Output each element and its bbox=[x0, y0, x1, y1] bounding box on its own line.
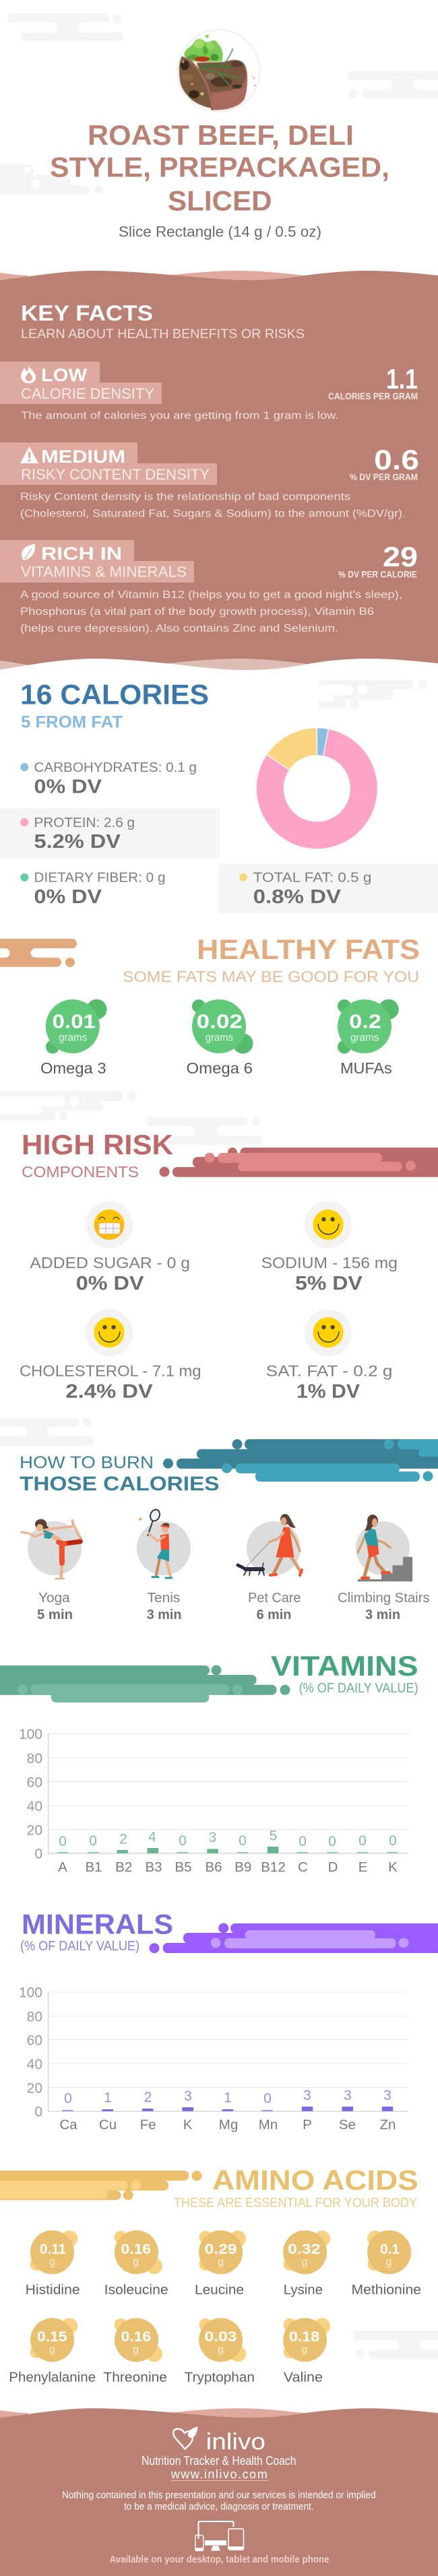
badge: MUFAs bbox=[338, 999, 399, 1077]
decoration: high risk banner bbox=[159, 1148, 438, 1177]
decoration: minerals banner bbox=[150, 1923, 438, 1953]
badge: omega 3: 0.01 bbox=[53, 1012, 96, 1033]
activity: tenis: 3 min bbox=[147, 1608, 182, 1622]
subheading: key facts: LEARN ABOUT HEALTH BENEFITS OR RISKS bbox=[21, 327, 305, 341]
badge: omega 3: Omega 3 bbox=[40, 1059, 106, 1077]
decorative cloud: mid left bbox=[0, 1091, 136, 1121]
logo: inlivo bbox=[173, 2426, 265, 2455]
title: STYLE, PREPACKAGED, bbox=[50, 151, 389, 183]
activity: tenis: Tenis bbox=[147, 1591, 180, 1606]
legend: carbohydrates bbox=[20, 760, 197, 798]
subheading: amino acids: THESE ARE ESSENTIAL FOR YOUR BODY bbox=[174, 2195, 417, 2210]
fact: rich in vitamins and minerals bbox=[0, 540, 418, 634]
subheading: vitamins percent of daily value: (% OF DAILY VALUE) bbox=[299, 1681, 418, 1696]
amino acid: methionine: g bbox=[386, 2256, 392, 2268]
bar chart: vitamins: 60 bbox=[27, 1775, 42, 1790]
amino acid: lysine: Lysine bbox=[284, 2283, 323, 2298]
bar chart: vitamins: B3 bbox=[145, 1859, 162, 1875]
bar chart: minerals: Mg bbox=[219, 2117, 238, 2133]
bar chart: minerals: 3 bbox=[184, 2088, 192, 2104]
activity: tenis bbox=[137, 1508, 191, 1622]
legend: total fat: TOTAL FAT: 0.5 g bbox=[253, 870, 371, 885]
bar chart: vitamins: 0 bbox=[34, 1847, 42, 1861]
bar chart: minerals: Ca bbox=[59, 2117, 77, 2133]
amino acid: histidine: 0.11 bbox=[40, 2242, 66, 2257]
risk item: sodium bbox=[261, 1201, 398, 1294]
badge: omega 3 bbox=[40, 999, 106, 1077]
serving size subtitle: Slice Rectangle (14 g / 0.5 oz) bbox=[119, 224, 321, 240]
fact: rich in vitamins and minerals: 29 bbox=[383, 541, 418, 572]
food photo: roast beef bbox=[178, 30, 260, 112]
legend: dietary fiber: DIETARY FIBER: 0 g bbox=[34, 870, 166, 885]
bar chart: minerals: 0 bbox=[263, 2091, 272, 2107]
legend: protein: PROTEIN: 2.6 g bbox=[34, 816, 135, 830]
fact: medium risky content density bbox=[0, 442, 419, 520]
heading: high risk: HIGH RISK bbox=[22, 1129, 173, 1160]
disclaimer: to be a medical advice, diagnosis or treatment. bbox=[124, 2501, 314, 2513]
bar chart: minerals: P bbox=[303, 2117, 312, 2133]
bar chart: minerals: 3 bbox=[383, 2088, 392, 2103]
amino acid: methionine: 0.1 bbox=[380, 2242, 400, 2257]
amino acid: histidine: g bbox=[49, 2256, 55, 2268]
activity: climbing stairs bbox=[338, 1515, 430, 1622]
bar chart: minerals: Fe bbox=[140, 2117, 156, 2133]
website link: www.inlivo.com bbox=[170, 2468, 268, 2481]
top wave bbox=[0, 271, 438, 657]
icon: flame bbox=[21, 365, 36, 383]
amino acid: methionine bbox=[352, 2231, 421, 2298]
fact: medium risky content density: 0.6 bbox=[374, 444, 419, 475]
fact: medium risky content density: % DV PER GRAM bbox=[350, 471, 418, 482]
decorative cloud: left of title bbox=[0, 165, 102, 194]
decorative cloud: burn bbox=[0, 1418, 94, 1446]
amino acid: threonine bbox=[103, 2318, 167, 2385]
bar chart: minerals: 0 bbox=[34, 2104, 42, 2120]
bar chart: vitamins: 0 bbox=[299, 1834, 307, 1849]
bar chart: vitamins: 0 bbox=[328, 1834, 336, 1849]
activity: pet care: 6 min bbox=[257, 1608, 291, 1622]
bar chart: minerals: 20 bbox=[27, 2081, 42, 2096]
subheading: healthy fats: SOME FATS MAY BE GOOD FOR YOU bbox=[123, 968, 419, 985]
bar chart: minerals: 3 bbox=[344, 2088, 352, 2103]
activity: pet care: Pet Care bbox=[248, 1591, 301, 1606]
heading: amino acids: AMINO ACIDS bbox=[212, 2165, 418, 2196]
bar chart: vitamins: K bbox=[388, 1859, 398, 1875]
amino acid: tryptophan bbox=[185, 2318, 255, 2385]
fact: low calorie density bbox=[0, 362, 418, 422]
amino acid: histidine bbox=[26, 2231, 80, 2298]
badge: omega 6: Omega 6 bbox=[186, 1059, 253, 1077]
legend: protein: 5.2% DV bbox=[34, 831, 121, 853]
activity: pet care bbox=[238, 1514, 302, 1622]
badge: omega 6: 0.02 bbox=[197, 1012, 243, 1033]
amino acid: isoleucine: Isoleucine bbox=[104, 2283, 168, 2298]
amino acid: tryptophan: g bbox=[218, 2344, 224, 2356]
decoration: amino acids banner bbox=[0, 2171, 202, 2200]
legend: protein bbox=[0, 808, 220, 858]
badge: MUFAs: grams bbox=[350, 1032, 379, 1044]
bottom wave bbox=[0, 653, 438, 675]
fact: rich in vitamins and minerals: Phosphorus (a vital part of the body growth process), Vitamin B6 bbox=[20, 606, 374, 618]
panel: footer bbox=[0, 2408, 438, 2576]
amino acid: valine: Valine bbox=[284, 2371, 323, 2385]
fact: rich in vitamins and minerals: % DV PER CALORIE bbox=[338, 568, 417, 579]
amino acid: valine: 0.18 bbox=[289, 2330, 319, 2345]
fact: medium risky content density: MEDIUM bbox=[41, 447, 125, 467]
amino acid: leucine: Leucine bbox=[195, 2283, 244, 2298]
legend: carbohydrates: CARBOHYDRATES: 0.1 g bbox=[34, 760, 197, 775]
bar chart: vitamins: 40 bbox=[27, 1799, 42, 1814]
activity: yoga: 5 min bbox=[37, 1608, 73, 1622]
bar chart: vitamins: 2 bbox=[119, 1832, 127, 1847]
activity: climbing stairs: 3 min bbox=[365, 1608, 400, 1622]
badge: MUFAs: 0.2 bbox=[349, 1012, 381, 1033]
disclaimer: Nothing contained in this presentation and our services is intended or implied bbox=[62, 2489, 376, 2501]
bar chart: minerals: Se bbox=[339, 2117, 356, 2133]
bar chart: vitamins: B6 bbox=[205, 1859, 222, 1875]
bar chart: minerals: 1 bbox=[104, 2090, 112, 2106]
activity: yoga: Yoga bbox=[38, 1591, 71, 1606]
fact: rich in vitamins and minerals: VITAMINS & MINERALS bbox=[21, 563, 187, 581]
decoration: vitamins banner bbox=[0, 1665, 290, 1703]
risk item: added sugar bbox=[30, 1201, 190, 1294]
legend: carbohydrates: 0% DV bbox=[34, 777, 102, 798]
risk item: saturated fat: SAT. FAT - 0.2 g bbox=[266, 1362, 392, 1379]
risk item: cholesterol: CHOLESTEROL - 7.1 mg bbox=[20, 1362, 201, 1379]
amino acid: leucine: g bbox=[218, 2256, 224, 2268]
bar chart: minerals: Zn bbox=[380, 2117, 396, 2133]
bar chart: vitamins: B2 bbox=[115, 1859, 132, 1875]
risk item: sodium: SODIUM - 156 mg bbox=[261, 1254, 398, 1272]
fact: low calorie density: The amount of calories you are getting from 1 gram is low. bbox=[21, 410, 338, 422]
amino acid: leucine bbox=[195, 2231, 246, 2298]
bar chart: vitamins: 0 bbox=[358, 1833, 367, 1849]
heading: how to burn those calories: HOW TO BURN bbox=[20, 1453, 154, 1472]
amino acid: phenylalanine bbox=[9, 2318, 96, 2385]
fact: rich in vitamins and minerals: (helps cure depression). Also contains Zinc and Selenium. bbox=[20, 623, 338, 634]
amino acid: lysine: g bbox=[302, 2256, 307, 2268]
amino acid: leucine: 0.29 bbox=[205, 2242, 237, 2257]
amino acid: tryptophan: 0.03 bbox=[205, 2330, 237, 2345]
bar chart: minerals: 1 bbox=[224, 2090, 232, 2106]
amino acid: histidine: Histidine bbox=[26, 2283, 80, 2298]
bar chart: minerals: 100 bbox=[19, 1985, 42, 2000]
amino acid: isoleucine: 0.16 bbox=[121, 2242, 151, 2257]
bar chart: vitamins: C bbox=[298, 1859, 308, 1875]
fact: rich in vitamins and minerals: RICH IN bbox=[41, 543, 122, 564]
decoration: burn banner bbox=[163, 1439, 438, 1482]
fact: low calorie density: CALORIES PER GRAM bbox=[328, 391, 418, 401]
bar chart: vitamins: B9 bbox=[234, 1859, 251, 1875]
fact: low calorie density: 1.1 bbox=[386, 363, 418, 395]
bar chart: vitamins: 0 bbox=[179, 1833, 187, 1849]
legend: dietary fiber: 0% DV bbox=[34, 886, 102, 908]
risk item: added sugar: 0% DV bbox=[76, 1273, 144, 1294]
bar chart: vitamins: A bbox=[58, 1859, 67, 1875]
bar chart: minerals: 40 bbox=[27, 2057, 42, 2072]
bar chart: vitamins: 3 bbox=[209, 1830, 216, 1845]
bar chart: minerals: 60 bbox=[27, 2033, 42, 2049]
bar chart: vitamins: 80 bbox=[27, 1751, 42, 1766]
title: SLICED bbox=[168, 185, 272, 216]
risk item: cholesterol bbox=[20, 1309, 201, 1403]
amino acid: isoleucine bbox=[104, 2231, 168, 2298]
heading: how to burn those calories: THOSE CALORIES bbox=[20, 1473, 220, 1495]
icon: warning triangle bbox=[20, 447, 38, 463]
activity: yoga bbox=[22, 1519, 82, 1622]
fact: medium risky content density: Risky Content density is the relationship of bad components bbox=[20, 492, 350, 502]
donut chart: macronutrients bbox=[256, 728, 377, 849]
amino acid: lysine: 0.32 bbox=[288, 2242, 321, 2257]
amino acid: lysine bbox=[283, 2231, 330, 2298]
badge: MUFAs: MUFAs bbox=[340, 1059, 392, 1077]
title bbox=[50, 119, 389, 216]
risk item: saturated fat: 1% DV bbox=[296, 1381, 361, 1403]
bar chart: vitamins: 4 bbox=[148, 1829, 156, 1845]
bar chart: minerals: Cu bbox=[99, 2117, 117, 2133]
logo: inlivo: inlivo bbox=[206, 2429, 265, 2455]
amino acid: tryptophan: Tryptophan bbox=[185, 2371, 255, 2385]
heading: 16 calories: 16 CALORIES bbox=[20, 679, 209, 711]
heading: vitamins: VITAMINS bbox=[271, 1650, 418, 1682]
amino acid: phenylalanine: g bbox=[49, 2344, 55, 2356]
disclaimer bbox=[62, 2489, 376, 2513]
bar chart: vitamins: 5 bbox=[270, 1828, 277, 1844]
bar chart: minerals: K bbox=[183, 2117, 193, 2133]
decorative cloud: calories bbox=[313, 680, 428, 709]
fact: low calorie density: LOW bbox=[41, 365, 88, 385]
legend: total fat bbox=[219, 863, 438, 913]
bar chart: vitamins: B5 bbox=[175, 1859, 192, 1875]
bar chart: vitamins bbox=[19, 1727, 408, 1875]
legend: dietary fiber bbox=[20, 870, 165, 908]
panel: key facts bbox=[0, 271, 438, 675]
amino acid: threonine: 0.16 bbox=[121, 2330, 151, 2345]
bar chart: minerals: 3 bbox=[303, 2088, 311, 2103]
heading: how to burn those calories bbox=[20, 1453, 220, 1495]
legend: total fat: 0.8% DV bbox=[253, 886, 342, 908]
decorative cloud: top left bbox=[7, 13, 124, 41]
subheading: components: COMPONENTS bbox=[22, 1163, 139, 1181]
amino acid: phenylalanine: Phenylalanine bbox=[9, 2371, 96, 2385]
bar chart: vitamins: 0 bbox=[389, 1833, 397, 1849]
decorative cloud: mid centre bbox=[146, 1117, 263, 1145]
bar chart: minerals bbox=[19, 1985, 408, 2133]
availability note: Available on your desktop, tablet and mobile phone bbox=[109, 2554, 329, 2565]
bar chart: minerals: 80 bbox=[27, 2010, 42, 2024]
bar chart: vitamins: B12 bbox=[261, 1859, 286, 1875]
badge: omega 6 bbox=[186, 999, 253, 1077]
tagline: Nutrition Tracker & Health Coach bbox=[142, 2454, 296, 2468]
bar chart: vitamins: 20 bbox=[27, 1822, 42, 1839]
activity: climbing stairs: Climbing Stairs bbox=[338, 1591, 430, 1606]
bar chart: minerals: 0 bbox=[64, 2091, 72, 2107]
amino acid: methionine: Methionine bbox=[352, 2283, 421, 2298]
bar chart: minerals: 2 bbox=[144, 2090, 152, 2105]
decorative cloud: top right bbox=[344, 71, 438, 98]
subheading: 5 from fat: 5 FROM FAT bbox=[21, 713, 123, 732]
title: ROAST BEEF, DELI bbox=[88, 119, 354, 151]
amino acid: phenylalanine: 0.15 bbox=[37, 2330, 67, 2345]
heading: healthy fats: HEALTHY FATS bbox=[197, 933, 420, 965]
icon: leaf bbox=[22, 544, 35, 560]
subheading: minerals percent of daily value: (% OF DAILY VALUE) bbox=[20, 1939, 139, 1954]
amino acid: threonine: Threonine bbox=[103, 2371, 167, 2385]
amino acid: valine bbox=[283, 2318, 330, 2385]
fact: medium risky content density: (Cholesterol, Saturated Fat, Sugars & Sodium) to the amount (%DV/gr). bbox=[20, 508, 406, 520]
risk item: cholesterol: 2.4% DV bbox=[65, 1381, 154, 1403]
badge: omega 6: grams bbox=[206, 1032, 233, 1044]
amino acid: valine: g bbox=[302, 2344, 307, 2356]
icon: devices bbox=[195, 2521, 244, 2551]
risk item: added sugar: ADDED SUGAR - 0 g bbox=[30, 1254, 190, 1272]
decoration: healthy fats banner bbox=[0, 939, 77, 967]
bar chart: vitamins: 0 bbox=[89, 1833, 97, 1849]
bar chart: vitamins: B1 bbox=[85, 1859, 102, 1875]
risk item: saturated fat bbox=[266, 1309, 392, 1403]
bar chart: minerals: Mn bbox=[259, 2117, 278, 2133]
amino acid: threonine: g bbox=[133, 2344, 139, 2356]
heading: key facts: KEY FACTS bbox=[21, 301, 153, 325]
bar chart: vitamins: E bbox=[358, 1859, 367, 1875]
fact: medium risky content density: RISKY CONTENT DENSITY bbox=[21, 466, 210, 483]
bar chart: vitamins: 0 bbox=[59, 1834, 67, 1849]
fact: low calorie density: CALORIE DENSITY bbox=[21, 385, 154, 402]
bar chart: vitamins: 0 bbox=[239, 1833, 247, 1849]
risk item: sodium: 5% DV bbox=[295, 1273, 363, 1294]
bar chart: vitamins: 100 bbox=[19, 1727, 42, 1742]
fact: rich in vitamins and minerals: A good source of Vitamin B12 (helps you to get a good night's sleep), bbox=[20, 589, 402, 601]
decorative cloud: bottom right bbox=[350, 2331, 438, 2359]
heading: minerals: MINERALS bbox=[22, 1909, 173, 1940]
badge: omega 3: grams bbox=[59, 1032, 87, 1044]
bar chart: vitamins: D bbox=[328, 1859, 338, 1875]
amino acid: isoleucine: g bbox=[133, 2256, 139, 2268]
footer wave bbox=[0, 2408, 438, 2576]
